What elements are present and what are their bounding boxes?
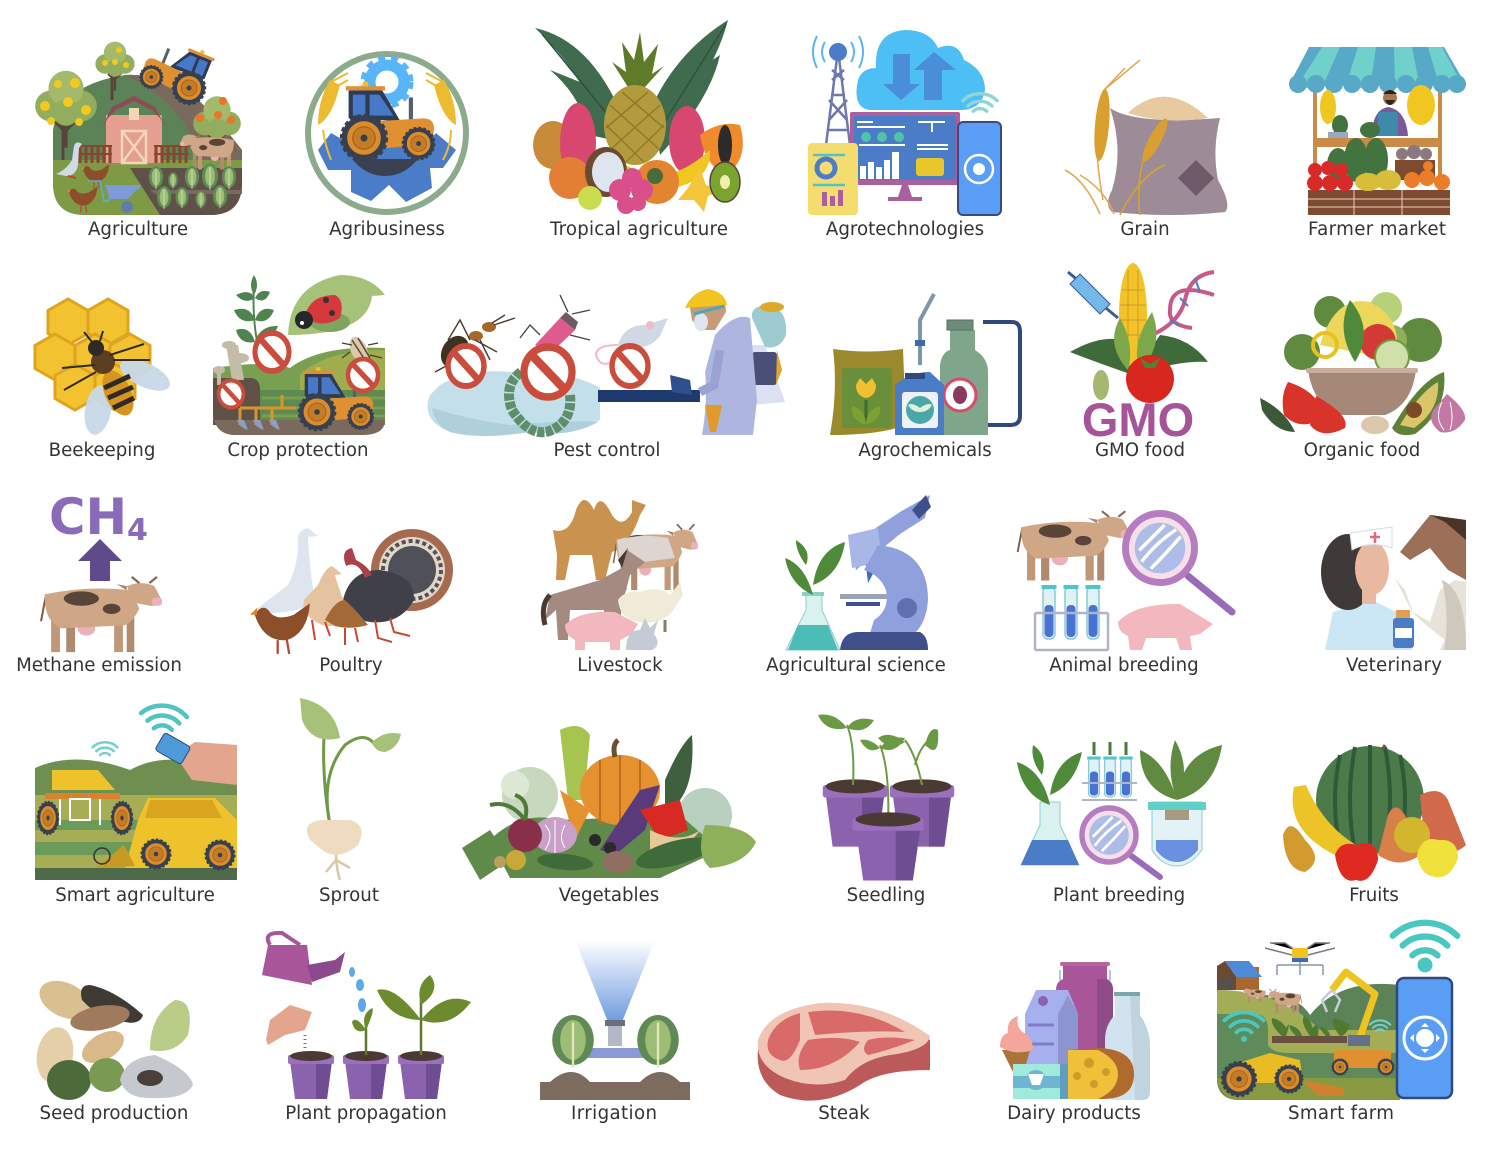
- label: Crop protection: Crop protection: [227, 440, 369, 461]
- cream box: [1013, 1064, 1071, 1099]
- panel: Steak: [758, 1003, 930, 1124]
- label: Steak: Steak: [818, 1103, 870, 1124]
- hibiscus: [609, 168, 653, 214]
- sheep: [618, 582, 683, 623]
- spray cone: [575, 940, 655, 1022]
- hydroponic plant: [1140, 740, 1222, 866]
- phone: [1397, 978, 1452, 1098]
- hand with seeds: [266, 1005, 312, 1045]
- magnifier: [1126, 514, 1232, 612]
- label: Vegetables: Vegetables: [559, 885, 659, 906]
- panel: Seedling: [818, 715, 954, 906]
- cows: [1243, 987, 1266, 1002]
- crops bed: [1272, 1016, 1350, 1043]
- label: Smart agriculture: Smart agriculture: [55, 885, 215, 906]
- panel: Methane emission: [16, 488, 182, 676]
- blue canister: [895, 372, 944, 435]
- red apple: [1335, 843, 1378, 881]
- icon: farm scene: [35, 32, 242, 215]
- pig: [1118, 604, 1213, 650]
- barn: [1217, 961, 1262, 990]
- panel: Tropical agriculture: [533, 20, 743, 240]
- panel: Dairy products: [1000, 962, 1150, 1124]
- icon: bee on honeycomb: [35, 299, 175, 437]
- drone: [1265, 943, 1335, 975]
- milk can: [1056, 962, 1113, 1060]
- beetle: [520, 295, 590, 362]
- panel: Grain: [1065, 60, 1227, 240]
- CH4 formula: CH: [49, 488, 127, 546]
- beetle: [342, 334, 382, 366]
- mist: [428, 371, 600, 436]
- sprinkler: [585, 1020, 645, 1058]
- pears: [1378, 808, 1420, 862]
- panel: Plant breeding: [1017, 740, 1222, 906]
- bee wings: [81, 353, 175, 437]
- icon: farm animals: [543, 500, 698, 650]
- watering can: [262, 933, 345, 985]
- onion: [1431, 394, 1465, 432]
- panel: Seed production: [32, 973, 193, 1124]
- label: GMO food: GMO food: [1095, 440, 1185, 461]
- test tubes: [1082, 742, 1137, 800]
- panel: Agribusiness: [308, 54, 466, 240]
- icon: germinating seed: [300, 698, 401, 880]
- awning: [1289, 47, 1466, 93]
- label: Sprout: Sprout: [319, 885, 379, 906]
- monitor: [850, 112, 960, 201]
- test tubes: [1035, 585, 1108, 650]
- green jug: [940, 330, 988, 435]
- icon: assorted seeds: [32, 973, 193, 1100]
- camel: [553, 500, 646, 580]
- magnifier: [1082, 808, 1160, 877]
- label: Tropical agriculture: Tropical agriculture: [549, 219, 728, 240]
- subscript 4: 4: [127, 513, 148, 548]
- tractor: [136, 32, 219, 109]
- label: Plant propagation: Plant propagation: [285, 1103, 447, 1124]
- label: Veterinary: Veterinary: [1346, 655, 1442, 676]
- avocado: [1392, 372, 1444, 435]
- label: Agriculture: Agriculture: [88, 219, 188, 240]
- panel: Irrigation: [540, 940, 690, 1124]
- blue gear: [318, 133, 456, 202]
- yellow tractor: [1222, 1053, 1344, 1096]
- icon: methane and cow: [41, 488, 162, 652]
- panel: Veterinary: [1321, 515, 1466, 676]
- flask plant: [785, 540, 845, 595]
- corn: [1119, 263, 1147, 367]
- ice cream: [1000, 1016, 1033, 1086]
- document: [808, 143, 858, 215]
- harvester: [94, 798, 237, 869]
- icon: sack of grain: [1065, 60, 1227, 215]
- spray wand: [598, 375, 700, 402]
- icon: market stall: [1289, 47, 1466, 215]
- bananas: [1293, 785, 1365, 855]
- plough: [240, 395, 296, 425]
- panel: Poultry: [250, 528, 453, 676]
- icon: watering can and pots: [262, 933, 471, 1099]
- GMO lettering: GMO: [1082, 393, 1194, 446]
- yellow apple: [1417, 839, 1458, 877]
- label: Poultry: Poultry: [319, 655, 383, 676]
- tomato wedges: [1283, 382, 1346, 433]
- icon: connected field machines: [35, 704, 237, 880]
- panel: Agriculture: [35, 32, 242, 240]
- label: Seedling: Seedling: [847, 885, 925, 906]
- icon: flask and microscope: [785, 495, 931, 650]
- flask: [786, 592, 840, 650]
- panel: Organic food: [1260, 292, 1465, 461]
- cow: [614, 524, 698, 590]
- label: Methane emission: Methane emission: [16, 655, 182, 676]
- caterpillar: [509, 372, 570, 432]
- autonomous robot: [38, 770, 132, 834]
- weed: [234, 275, 278, 342]
- label: Plant breeding: Plant breeding: [1053, 885, 1185, 906]
- icon: tractor in gear ring: [308, 54, 466, 212]
- panel: Plant propagation: [262, 933, 471, 1124]
- label: Agricultural science: Agricultural science: [766, 655, 946, 676]
- cheese: [1068, 1048, 1134, 1099]
- icon: plant genetics: [1017, 740, 1222, 877]
- fence: [78, 146, 189, 154]
- microscope: [840, 495, 931, 650]
- label: Irrigation: Irrigation: [571, 1103, 657, 1124]
- white cow: [1395, 578, 1466, 650]
- icon: tropical fruit: [533, 20, 743, 214]
- label: Grain: Grain: [1120, 219, 1170, 240]
- milk bottle: [1105, 992, 1150, 1100]
- tower: [813, 36, 863, 145]
- DNA helix: [1152, 272, 1214, 335]
- mushrooms: [213, 341, 249, 385]
- leaf and ladybug: [288, 275, 385, 335]
- label: Agrochemicals: Agrochemicals: [858, 440, 992, 461]
- palm leaves: [535, 20, 728, 155]
- partridge: [325, 600, 368, 628]
- bowl: [1308, 370, 1416, 415]
- wifi signal: [1393, 923, 1457, 972]
- phone: [958, 122, 1001, 215]
- icon: modified corn and tomato: [1068, 263, 1214, 446]
- barn: [102, 96, 166, 163]
- label: Beekeeping: Beekeeping: [49, 440, 155, 461]
- robotic arm: [1322, 972, 1394, 1075]
- panel: Agrochemicals: [830, 294, 1020, 461]
- panel: Vegetables: [462, 726, 756, 906]
- goose: [56, 142, 82, 176]
- cloud: [856, 30, 985, 110]
- panel: Agrotechnologies: [808, 30, 1001, 240]
- soil: [540, 1072, 690, 1100]
- panel: Beekeeping: [35, 299, 175, 461]
- panel: Smart agriculture: [35, 704, 237, 906]
- label: Smart farm: Smart farm: [1288, 1103, 1394, 1124]
- icon: fertiliser bag and containers: [830, 294, 1020, 435]
- seed bag: [830, 349, 906, 435]
- panel: Sprout: [300, 698, 401, 906]
- icon: seedlings in pots: [818, 715, 954, 880]
- backpack: [745, 302, 786, 405]
- label: Agrotechnologies: Agrotechnologies: [826, 219, 984, 240]
- wheat ears: [318, 80, 456, 125]
- operator: [685, 289, 757, 435]
- up arrow: [78, 539, 122, 581]
- vaccine vial: [1393, 610, 1414, 648]
- label: Dairy products: Dairy products: [1007, 1103, 1141, 1124]
- panel: Farmer market: [1289, 47, 1466, 240]
- pineapple: [612, 32, 664, 98]
- icon: sprinkler and plants: [540, 940, 690, 1100]
- turkey tail: [371, 529, 453, 611]
- label: Fruits: Fruits: [1349, 885, 1399, 906]
- watermelon: [1316, 745, 1424, 855]
- carton: [1025, 990, 1078, 1070]
- crates: [1308, 190, 1450, 215]
- flask: [1021, 802, 1079, 865]
- horse: [545, 550, 645, 640]
- icon: sprayer operator and pests: [428, 289, 786, 436]
- icon: connected farm technology: [808, 30, 1001, 215]
- icon: vegetable pile: [462, 726, 756, 880]
- label: Agribusiness: Agribusiness: [329, 219, 445, 240]
- bee body: [62, 331, 150, 420]
- panel: Pest control: [428, 289, 786, 461]
- syringe: [1068, 272, 1118, 318]
- icon: fruit assortment: [1283, 745, 1466, 881]
- icon: steak: [758, 1003, 930, 1101]
- vendor: [1372, 90, 1408, 136]
- icon: genetics lab animals: [1018, 511, 1232, 650]
- label: Pest control: Pest control: [554, 440, 660, 461]
- label: Animal breeding: Animal breeding: [1049, 655, 1199, 676]
- icon: veterinarian and animals: [1321, 515, 1466, 650]
- label: Seed production: Seed production: [40, 1103, 188, 1124]
- panel: Animal breeding: [1018, 511, 1232, 676]
- hand with phone: [155, 732, 237, 785]
- panel: Agricultural science: [766, 495, 946, 676]
- icon: birds: [250, 528, 453, 654]
- icon: protected field: [213, 275, 385, 435]
- icon: salad bowl: [1260, 292, 1465, 435]
- goose: [255, 528, 318, 613]
- panel: GMO food: [1068, 263, 1214, 461]
- panel: Crop protection: [213, 275, 385, 461]
- light blue gear: [363, 58, 411, 106]
- nurse: [1321, 527, 1412, 650]
- icon: dairy goods: [1000, 962, 1150, 1100]
- rabbit: [626, 618, 658, 650]
- horse: [1400, 515, 1466, 580]
- label: Organic food: Organic food: [1304, 440, 1420, 461]
- bananas: [620, 150, 710, 190]
- panel: Fruits: [1283, 745, 1466, 906]
- pig: [565, 612, 638, 650]
- panel: Smart farm: [1217, 923, 1457, 1124]
- label: Farmer market: Farmer market: [1308, 219, 1446, 240]
- ant: [435, 315, 515, 373]
- icon: smart farm scene and phone: [1217, 923, 1457, 1100]
- label: Livestock: Livestock: [577, 655, 663, 676]
- panel: Livestock: [543, 500, 698, 676]
- mouse: [596, 318, 668, 364]
